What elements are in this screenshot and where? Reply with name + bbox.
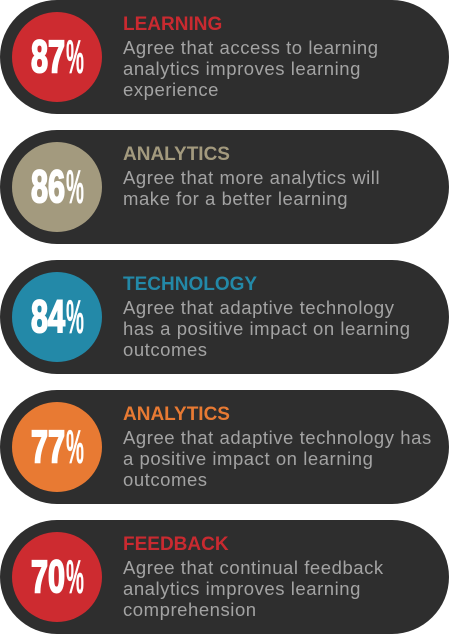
text: analytics: make for a better learning (123, 188, 348, 209)
text: analytics: ANALYTICS (123, 144, 230, 165)
stat circle: 70%: % (66, 550, 84, 603)
panel: analytics 77% (0, 390, 449, 504)
panel: learning (0, 0, 449, 114)
text: analytics (123, 144, 380, 209)
text: technology: TECHNOLOGY (123, 274, 257, 295)
text: analytics (123, 404, 432, 490)
text: analytics: a positive impact on learning (123, 448, 373, 469)
text: feedback: FEEDBACK (123, 534, 229, 555)
text: analytics: ANALYTICS (123, 404, 230, 425)
text: analytics: Agree that adaptive technology has (123, 427, 432, 448)
text: learning: LEARNING (123, 14, 222, 35)
text: learning: analytics improves learning (123, 58, 361, 79)
text: learning: experience (123, 79, 219, 100)
panel: technology (0, 260, 449, 374)
panel: analytics 86% (0, 130, 449, 244)
stat circle: 77%: 77 (31, 421, 65, 472)
stat circle: 84% (12, 272, 102, 362)
stat circle: 86% (12, 142, 102, 232)
stat circle: 86%: 86 (31, 161, 65, 212)
stat circle: 86%: % (66, 160, 84, 213)
text: technology (123, 274, 411, 360)
text: feedback: Agree that continual feedback (123, 557, 384, 578)
text: analytics: Agree that more analytics will (123, 167, 380, 188)
panel: feedback (0, 520, 449, 634)
stat circle: 70%: 70 (31, 551, 65, 602)
text: feedback: analytics improves learning (123, 578, 361, 599)
text: analytics: outcomes (123, 469, 208, 490)
stat circle: 77% (12, 402, 102, 492)
text: technology: outcomes (123, 339, 208, 360)
text: feedback: comprehension (123, 599, 257, 620)
stat circle: 77%: % (66, 420, 84, 473)
text: feedback (123, 534, 384, 620)
text: technology: has a positive impact on learning (123, 318, 411, 339)
stat circle: 84%: % (66, 290, 84, 343)
stat circle: 70% (12, 532, 102, 622)
text: learning (123, 14, 379, 100)
stat circle: 87%: % (66, 30, 84, 83)
text: technology: Agree that adaptive technology (123, 297, 395, 318)
stat circle: 84%: 84 (31, 291, 65, 342)
stat circle: 87% (12, 12, 102, 102)
text: learning: Agree that access to learning (123, 37, 379, 58)
stat circle: 87%: 87 (31, 31, 65, 82)
